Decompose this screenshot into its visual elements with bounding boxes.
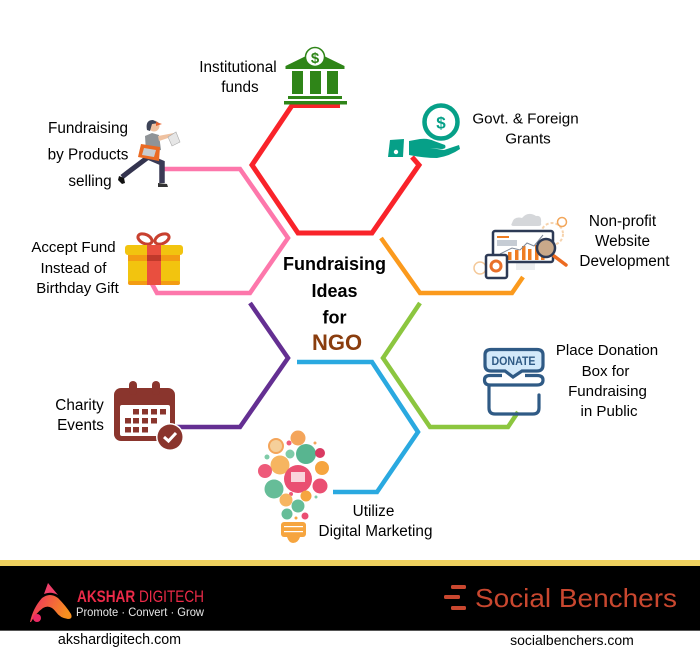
label: Charity Events: Charity	[55, 397, 104, 414]
label: Place Donation Box: Fundraising	[568, 383, 647, 400]
label: Institutional funds	[199, 59, 277, 96]
url: akshardigitech.com: akshardigitech.com	[58, 632, 181, 648]
logo: Akshar Digitech: AKSHAR DIGITECH	[77, 587, 204, 606]
label: Govt. and Foreign Grants	[472, 110, 579, 148]
label: Institutional funds: Institutional	[199, 59, 277, 76]
label: Govt. and Foreign Grants: Grants	[505, 130, 551, 148]
connector: green	[383, 303, 518, 427]
icon: gift box	[125, 232, 183, 285]
icon: calendar	[114, 381, 184, 451]
title: Ideas	[311, 281, 358, 301]
label: Utilize Digital Marketing	[319, 503, 432, 540]
label: Accept Fund Instead of Birthday Gift	[31, 239, 120, 297]
title: NGO	[312, 330, 362, 355]
label: Fundraising by Products selling: selling	[68, 173, 112, 190]
label: Charity Events: Events	[57, 417, 104, 434]
label: Accept Fund Instead of Birthday Gift: Birthday Gift	[36, 280, 120, 297]
connector: blue	[297, 362, 418, 492]
label: Institutional funds: funds	[221, 79, 259, 96]
label: Place Donation Box: in Public	[580, 403, 638, 420]
label: Place Donation Box: Box for	[582, 363, 629, 380]
icon: analytics dashboard	[474, 214, 566, 278]
footer band	[0, 560, 700, 631]
label: Non-profit Website Development	[579, 213, 670, 270]
icon: hand with coin	[388, 106, 460, 158]
label: Place Donation Box: Place Donation	[556, 342, 658, 359]
url: socialbenchers.com: socialbenchers.com	[510, 632, 634, 648]
icon: donation box: DONATE	[492, 356, 536, 368]
connector: purple	[176, 303, 288, 427]
connector: pink	[151, 169, 288, 293]
connector: red	[252, 106, 419, 233]
label: Fundraising by Products selling: by Products	[48, 146, 129, 164]
title: Fundraising	[283, 254, 386, 274]
logo: Social Benchers: Social Benchers	[475, 583, 677, 613]
title: for	[322, 308, 346, 328]
logo: Akshar Digitech: Promote · Convert · Grow	[76, 605, 204, 619]
icon: donation box	[484, 350, 543, 414]
title	[283, 254, 386, 355]
logo: Akshar Digitech	[30, 583, 204, 622]
icon: bank: $	[311, 50, 320, 67]
icon: running man with box	[118, 120, 180, 187]
label: Non-profit Website Development: Non-profit	[589, 213, 657, 230]
label: Non-profit Website Development: Website	[595, 233, 650, 250]
label: Utilize Digital Marketing: Utilize	[353, 503, 394, 520]
label: Utilize Digital Marketing: Digital Marketing	[319, 523, 432, 540]
label: Fundraising by Products selling: Fundraising	[48, 120, 128, 137]
label: Non-profit Website Development: Development	[579, 253, 670, 270]
label: Govt. and Foreign Grants: Govt. & Foreign	[472, 110, 579, 128]
icon: light bulb of circles	[258, 430, 329, 543]
icon: bank	[284, 48, 347, 104]
connector: orange	[381, 238, 523, 293]
label: Accept Fund Instead of Birthday Gift: Accept Fund	[31, 239, 116, 256]
label: Place Donation Box	[556, 342, 658, 420]
label: Fundraising by Products selling	[48, 120, 129, 190]
icon: hand with coin: $	[436, 114, 446, 132]
label: Charity Events	[55, 397, 104, 434]
label: Accept Fund Instead of Birthday Gift: Instead of	[41, 260, 107, 277]
